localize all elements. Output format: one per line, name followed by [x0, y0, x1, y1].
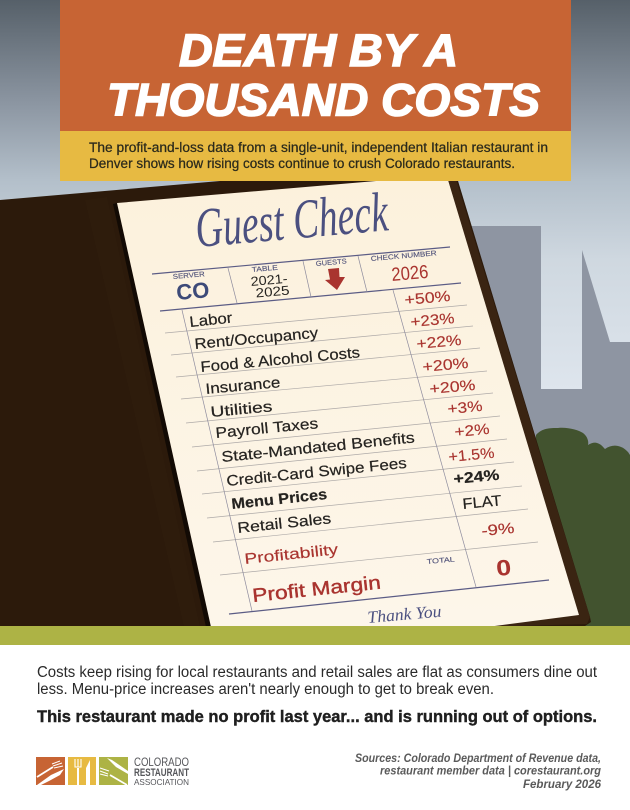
percentage values: +50%	[404, 288, 451, 309]
guest check heading: Guest Check	[193, 181, 391, 260]
percentage values	[404, 288, 515, 581]
table field	[250, 265, 290, 300]
logo: Colorado Restaurant Association	[36, 755, 189, 787]
check number field	[371, 250, 437, 286]
title banner	[60, 0, 571, 131]
logo wordmark: COLORADO	[134, 755, 189, 769]
logo wordmark: RESTAURANT	[134, 767, 189, 779]
olive ground band	[0, 626, 630, 645]
cost line items: Food & Alcohol Costs	[200, 344, 361, 376]
cost line items: Utilities	[210, 398, 273, 421]
table rules	[165, 290, 549, 614]
cost line items: Rent/Occupancy	[194, 325, 319, 353]
percentage values: +2%	[454, 421, 490, 441]
sources: restaurant member data | corestaurant.org	[380, 766, 601, 778]
thank you signature: Thank You	[367, 602, 442, 627]
title: THOUSAND COSTS	[107, 74, 540, 126]
logo icon: green square with knife and fork	[99, 757, 128, 785]
cost line items: TOTAL	[427, 557, 455, 566]
header rules	[152, 247, 461, 311]
cost line items: State-Mandated Benefits	[221, 429, 415, 466]
cost line items	[189, 310, 455, 607]
table field: 2025	[255, 283, 290, 300]
subtitle banner	[60, 131, 571, 181]
cost line items: Retail Sales	[237, 510, 332, 537]
percentage values: +1.5%	[448, 445, 495, 466]
percentage values: -9%	[481, 520, 515, 540]
server field: CO	[175, 277, 210, 305]
cost line items: Payroll Taxes	[215, 415, 319, 442]
sources: Sources: Colorado Department of Revenue data,	[355, 753, 601, 765]
menu spine fold	[85, 197, 200, 627]
percentage values: +23%	[410, 310, 455, 331]
server field: SERVER	[173, 271, 205, 281]
body copy: less. Menu-price increases aren't nearly enough to get to break even.	[37, 681, 494, 698]
percentage values: 0	[495, 555, 512, 581]
percentage values: +20%	[422, 355, 469, 376]
subtitle text	[89, 140, 548, 171]
cost line items: Credit-Card Swipe Fees	[226, 455, 407, 490]
percentage values: +20%	[429, 377, 476, 398]
table field: TABLE	[252, 265, 278, 274]
background: city buildings	[470, 226, 630, 630]
logo wordmark	[134, 755, 189, 787]
table field: 2021-	[250, 271, 288, 289]
percentage values: FLAT	[462, 492, 502, 513]
sources: February 2026	[523, 779, 602, 791]
cost line items: Profit Margin	[251, 573, 382, 607]
guests field with down arrow: GUESTS	[316, 258, 347, 268]
menu folder	[0, 161, 591, 627]
guests field with down arrow	[316, 258, 347, 290]
menu inner edge	[447, 176, 590, 627]
percentage values: +24%	[453, 467, 500, 488]
logo wordmark: ASSOCIATION	[134, 777, 189, 787]
subtitle text: The profit-and-loss data from a single-unit, independent Italian restaurant in	[89, 140, 548, 155]
percentage values: +3%	[447, 398, 483, 418]
guest check paper	[117, 175, 579, 627]
body copy: Costs keep rising for local restaurants and retail sales are flat as consumers dine out	[37, 664, 598, 681]
logo icon: orange square with fork and knife	[36, 757, 65, 786]
paper shadow	[113, 203, 211, 627]
cost line items: Labor	[189, 310, 233, 331]
logo icon: yellow square with fork and knife	[68, 757, 96, 785]
title: DEATH BY A	[179, 25, 458, 76]
bold conclusion: This restaurant made no profit last year... and is running out of options.	[37, 708, 597, 726]
body copy	[37, 664, 598, 698]
title	[107, 25, 540, 126]
check number field: 2026	[391, 262, 429, 286]
percentage values: +22%	[416, 332, 462, 353]
background: sky	[0, 0, 630, 400]
subtitle text: Denver shows how rising costs continue to crush Colorado restaurants.	[89, 156, 515, 171]
cost line items: Menu Prices	[231, 486, 328, 513]
sources	[355, 753, 602, 791]
cost line items: Insurance	[205, 374, 281, 398]
check number field: CHECK NUMBER	[371, 250, 437, 263]
background: green trees	[520, 428, 630, 630]
cost line items: Profitability	[244, 541, 340, 568]
